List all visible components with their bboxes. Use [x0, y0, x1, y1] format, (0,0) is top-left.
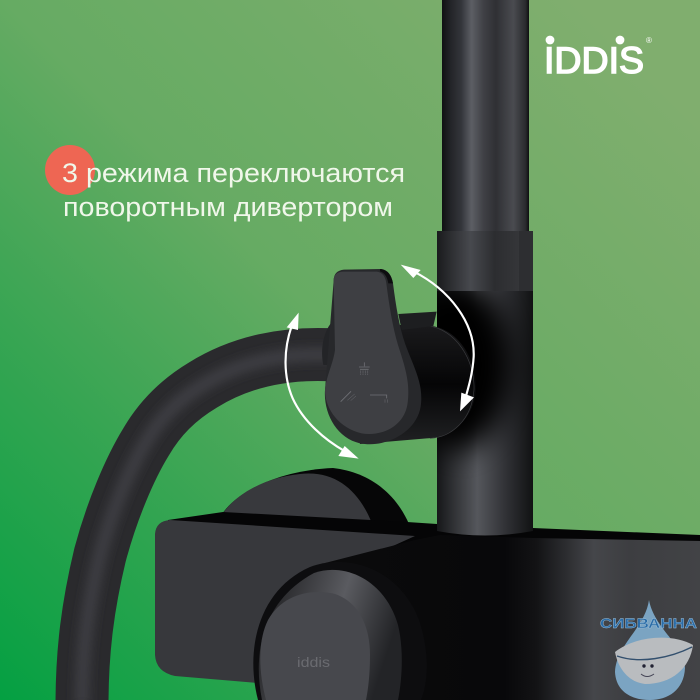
- shower pipe: [437, 0, 533, 500]
- diverter shadow: [325, 269, 421, 444]
- heading text: поворотным дивертором: [63, 192, 393, 222]
- top edge of lever: [380, 269, 393, 283]
- watermark drop: [615, 600, 685, 700]
- heading text: 3 режима переключаются: [62, 158, 405, 188]
- diverter assembly: [286, 265, 476, 459]
- lower pipe base: [437, 500, 533, 536]
- mixer body: [325, 535, 700, 700]
- icon: hand shower: [341, 391, 356, 402]
- lower pipe: [437, 291, 533, 536]
- arrow: lower rotation: [286, 313, 359, 459]
- handle back ring: [253, 562, 427, 700]
- upper pipe: [442, 0, 529, 232]
- handle logo: iddis: [297, 654, 330, 670]
- diverter barrel: [353, 325, 476, 444]
- diverter lever: [325, 272, 408, 434]
- pipe shadow behind diverter: [437, 291, 522, 464]
- connection collar: [398, 312, 437, 330]
- handle cap: [260, 592, 370, 700]
- watermark: [600, 600, 697, 700]
- faucet body: [155, 500, 700, 700]
- watermark bathtub: [615, 638, 693, 684]
- red number badge: [45, 145, 95, 195]
- wall flange: [222, 468, 409, 524]
- brand logo: ®: [646, 36, 652, 45]
- black shadow strip: [168, 512, 700, 560]
- pipe collar: [437, 231, 533, 292]
- mounting plate: [155, 520, 415, 684]
- watermark name: СИБВАННА: [600, 615, 697, 631]
- heading text: [62, 158, 405, 222]
- barrel edge line: [427, 325, 474, 438]
- handle bevel: [259, 570, 402, 700]
- icon: spout: [370, 395, 387, 403]
- arrow: upper rotation: [401, 265, 474, 411]
- brand logo: IDDIS: [544, 40, 644, 81]
- hose: [82, 354, 335, 700]
- icon: shower head: [359, 362, 370, 375]
